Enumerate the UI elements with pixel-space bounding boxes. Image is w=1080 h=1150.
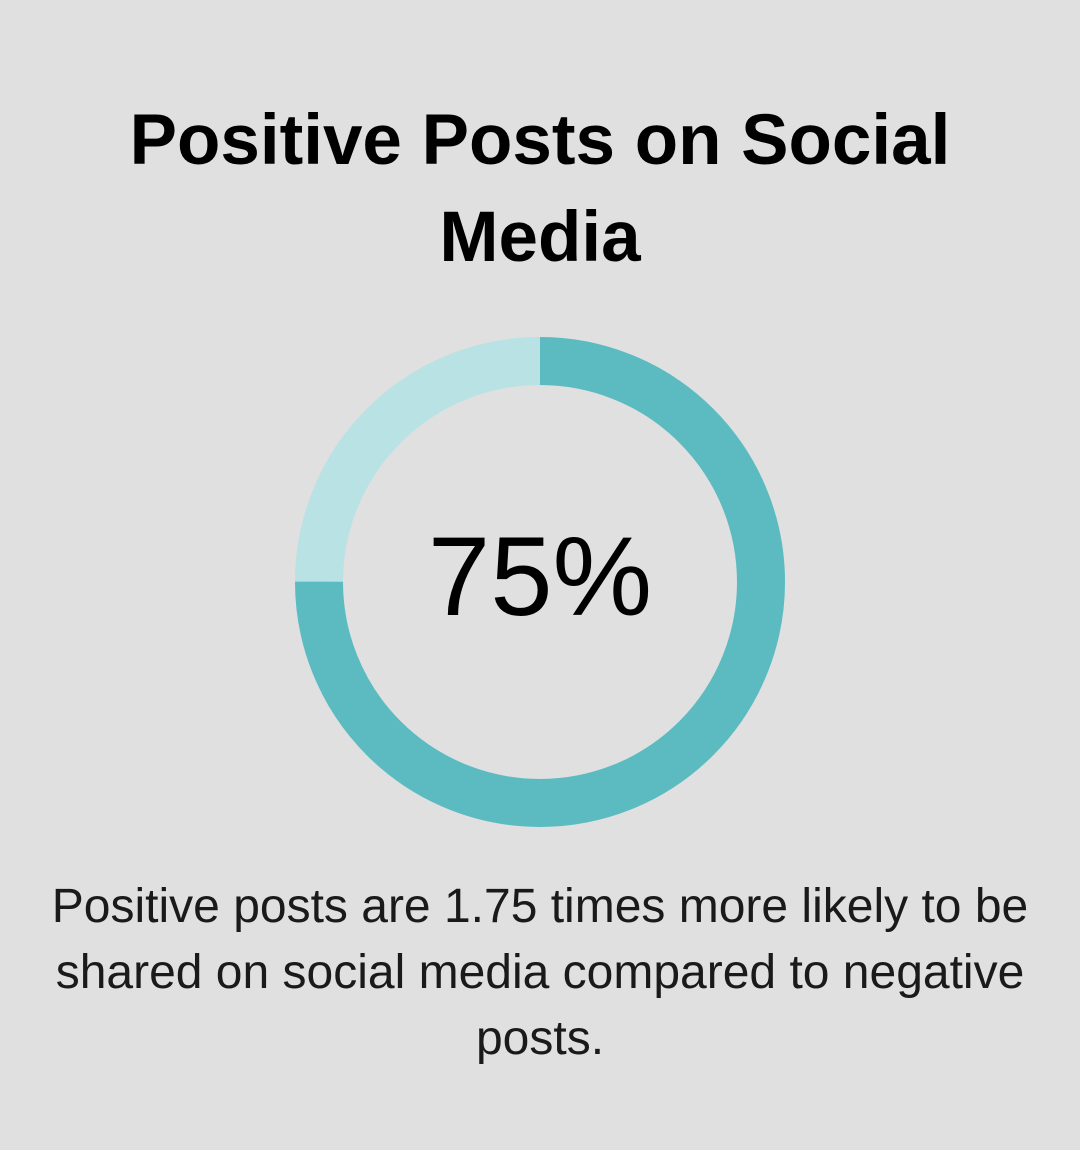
background ring segment — [319, 361, 761, 803]
title: Media — [439, 198, 641, 277]
title — [130, 101, 950, 277]
description text: Positive posts are 1.75 times more likely to be shared on social media compared to negative posts. — [52, 880, 1028, 1065]
percentage label: 75% — [428, 514, 652, 639]
75% segment — [319, 361, 761, 803]
donut chart — [295, 337, 785, 827]
title: Positive Posts on Social — [130, 101, 950, 180]
